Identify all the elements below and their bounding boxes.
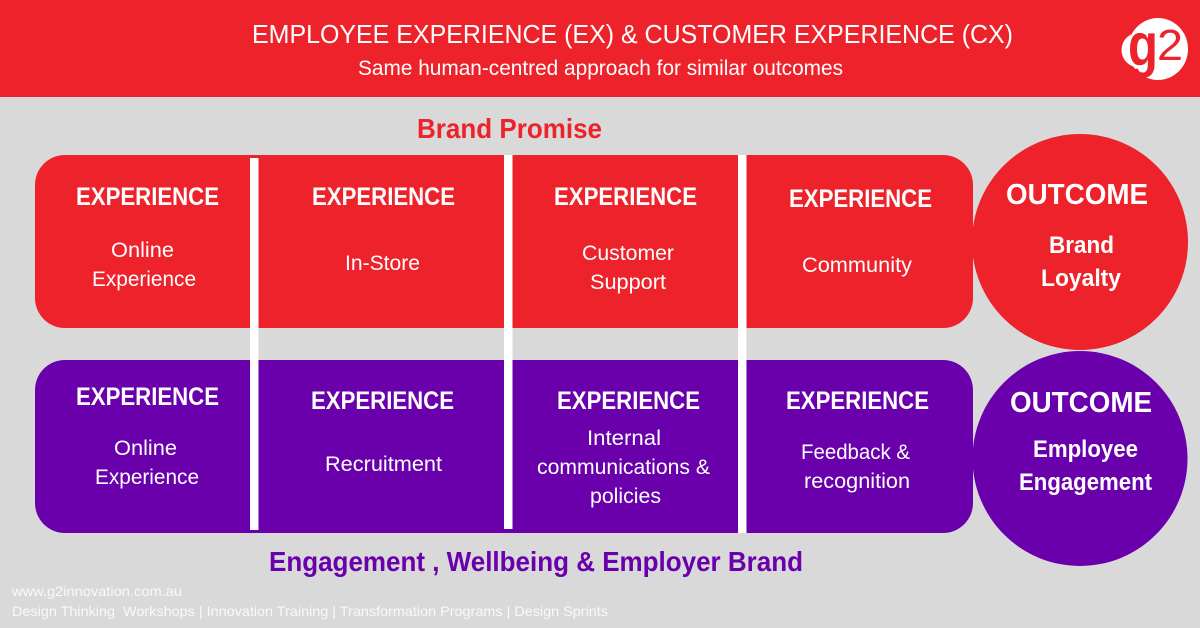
employee experience: internal communications: EXPERIENCE bbox=[557, 387, 700, 415]
footer text: www.g2innovation.com.au bbox=[11, 583, 182, 599]
employee experience: feedback: Feedback & bbox=[801, 441, 910, 464]
customer experience: community: EXPERIENCE bbox=[789, 185, 932, 213]
heading: brand promise: Brand Promise bbox=[417, 113, 602, 144]
employee experience: recruitment: Recruitment bbox=[325, 453, 442, 476]
outcome circle: employee engagement bbox=[972, 351, 1188, 566]
customer experience: online: Online bbox=[111, 239, 174, 262]
subtitle: Same human-centred approach for similar outcomes bbox=[358, 57, 843, 80]
customer experience: online: EXPERIENCE bbox=[76, 183, 219, 211]
employee experience: recruitment: EXPERIENCE bbox=[311, 387, 454, 415]
employee experience: recruitment bbox=[311, 387, 454, 476]
outcome circle: employee engagement: Engagement bbox=[1019, 469, 1152, 496]
panel: employee experiences bbox=[35, 360, 973, 533]
icon: g2 logo bbox=[1122, 11, 1188, 80]
employee experience: feedback: EXPERIENCE bbox=[786, 387, 929, 415]
customer experience: online bbox=[76, 183, 219, 291]
customer experience: community bbox=[789, 185, 932, 277]
outcome circle: brand loyalty bbox=[972, 134, 1188, 350]
employee experience: internal communications: Internal bbox=[587, 427, 661, 450]
customer experience: online: Experience bbox=[92, 268, 196, 291]
employee experience: feedback bbox=[786, 387, 929, 493]
employee experience: online: EXPERIENCE bbox=[76, 383, 219, 411]
customer experience: support: Support bbox=[590, 271, 666, 294]
title: EMPLOYEE EXPERIENCE (EX) & CUSTOMER EXPERIENCE (CX) bbox=[252, 19, 1013, 49]
customer experience: in-store: EXPERIENCE bbox=[312, 183, 455, 211]
footer text: Design Thinking Workshops | Innovation Training | Transformation Programs | Design Sprints bbox=[12, 603, 608, 619]
employee experience: internal communications: communications & bbox=[537, 456, 710, 479]
outcome circle: brand loyalty: OUTCOME bbox=[1006, 179, 1148, 211]
outcome circle: brand loyalty: Loyalty bbox=[1041, 265, 1122, 292]
employee experience: online bbox=[76, 383, 219, 489]
footer text bbox=[11, 583, 608, 619]
outcome circle: employee engagement: Employee bbox=[1033, 436, 1138, 463]
customer experience: in-store: In-Store bbox=[345, 252, 420, 275]
employee experience: internal communications bbox=[537, 387, 710, 508]
employee experience: internal communications: policies bbox=[590, 485, 661, 508]
outcome circle: brand loyalty: Brand bbox=[1049, 232, 1114, 259]
customer experience: support: Customer bbox=[582, 242, 674, 265]
heading: engagement, wellbeing and employer brand: Engagement , Wellbeing & Employer Brand bbox=[269, 546, 803, 577]
employee experience: online: Online bbox=[114, 437, 177, 460]
customer experience: support bbox=[554, 183, 697, 294]
outcome circle: employee engagement: OUTCOME bbox=[1010, 387, 1152, 419]
panel: customer experiences bbox=[35, 155, 973, 328]
employee experience: online: Experience bbox=[95, 466, 199, 489]
header banner bbox=[0, 0, 1200, 97]
employee experience: feedback: recognition bbox=[804, 470, 910, 493]
icon: g2 logo: g bbox=[1128, 11, 1158, 78]
customer experience: community: Community bbox=[802, 254, 913, 277]
customer experience: in-store bbox=[312, 183, 455, 275]
customer experience: support: EXPERIENCE bbox=[554, 183, 697, 211]
icon: g2 logo: 2 bbox=[1157, 21, 1183, 70]
